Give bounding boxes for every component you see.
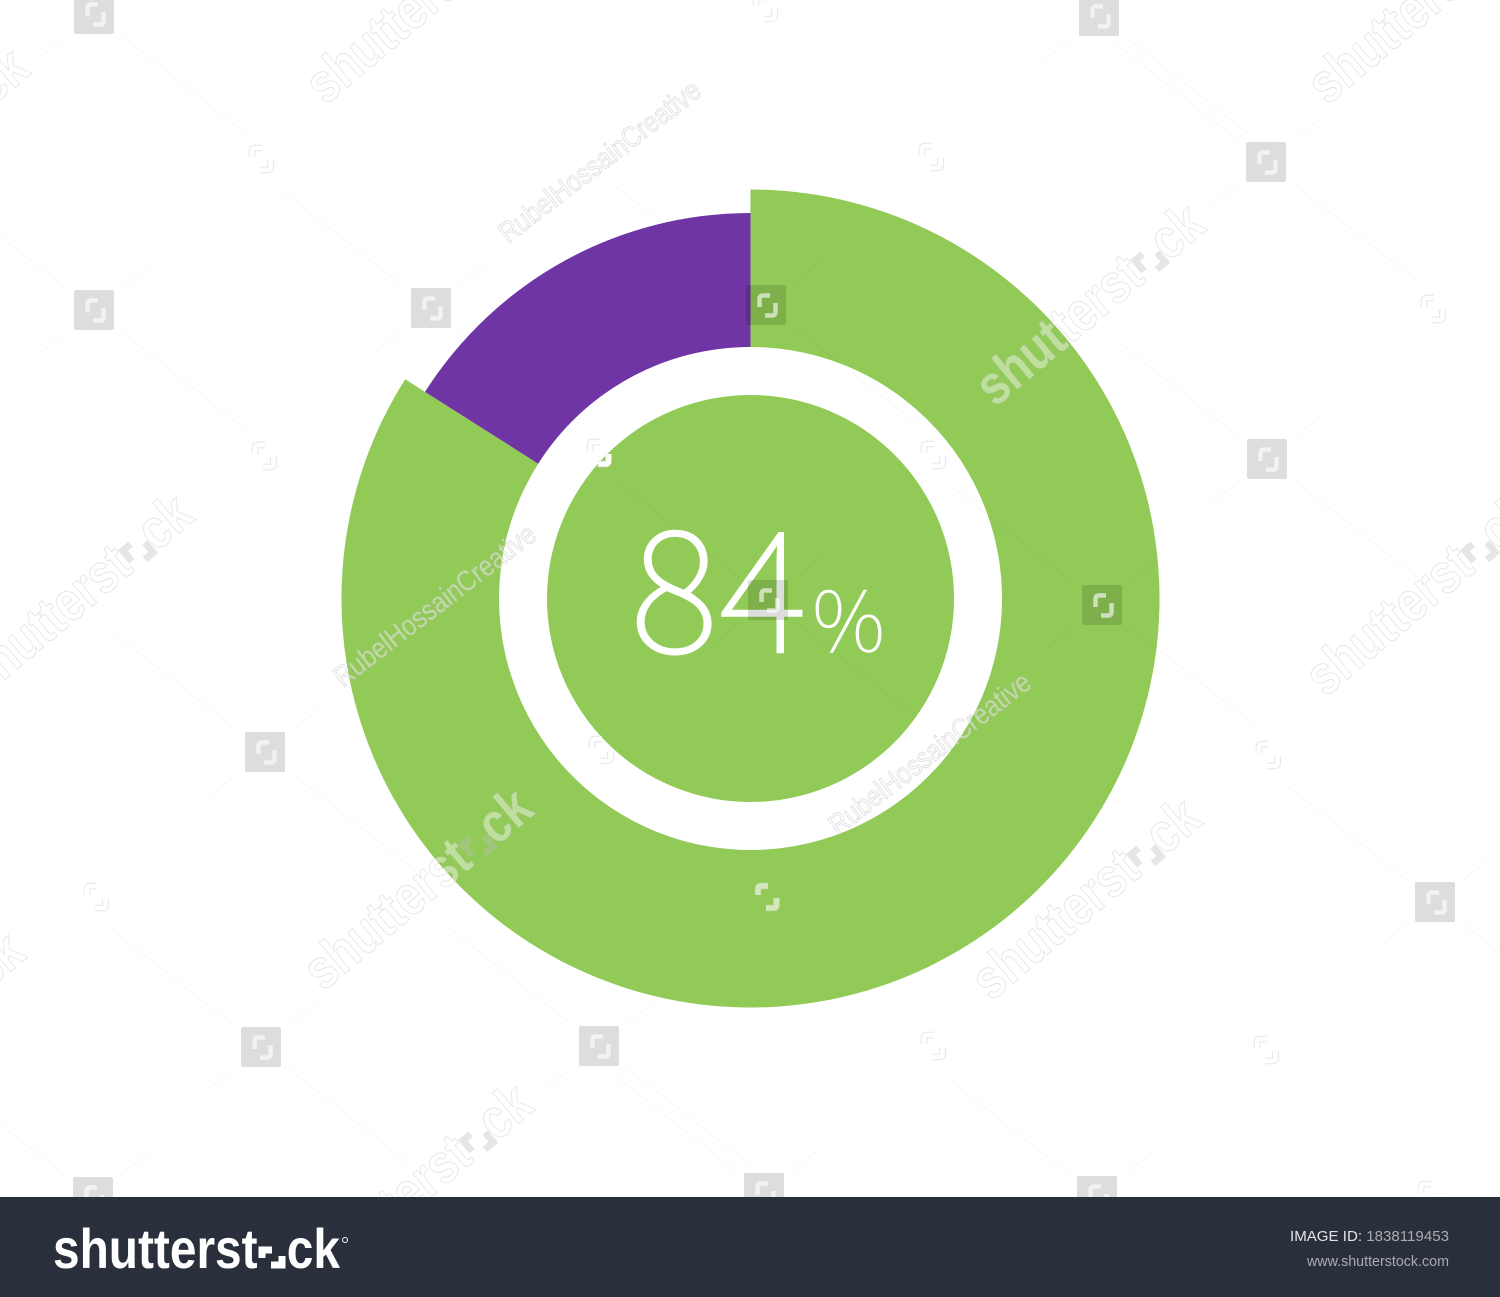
shutterstock logo: shutterstock xyxy=(53,1217,341,1280)
watermark: shutterstock and contributor text: shutterstock xyxy=(290,774,544,1001)
watermark: shutterstock and contributor text: shutterstock xyxy=(290,1070,544,1297)
green segment: 84 percent xyxy=(342,190,1160,1008)
value label: 84%: 8 xyxy=(630,456,719,702)
watermark: contributor name xyxy=(328,74,1037,842)
donut chart xyxy=(342,190,1160,1008)
website: www.shutterstock.com xyxy=(1306,1254,1449,1270)
value label: 84%: 4 xyxy=(719,456,808,702)
watermark: contributor name: RubelHossainCreative xyxy=(328,518,542,694)
watermark: shutterstock and contributor text: shutterstock xyxy=(958,784,1212,1011)
watermark: contributor name: RubelHossainCreative xyxy=(493,74,707,250)
watermark: contributor name: RubelHossainCreative xyxy=(823,666,1037,842)
image id: IMAGE ID: 1838119453 xyxy=(1290,1228,1449,1245)
footer bar xyxy=(0,1197,1500,1297)
watermark: shutterstock and contributor text: shutterstock xyxy=(962,190,1216,417)
value label: 84% xyxy=(630,456,885,702)
value label: 84%: % xyxy=(812,556,885,676)
center circle xyxy=(547,395,954,802)
purple segment: 16 percent xyxy=(425,213,750,464)
